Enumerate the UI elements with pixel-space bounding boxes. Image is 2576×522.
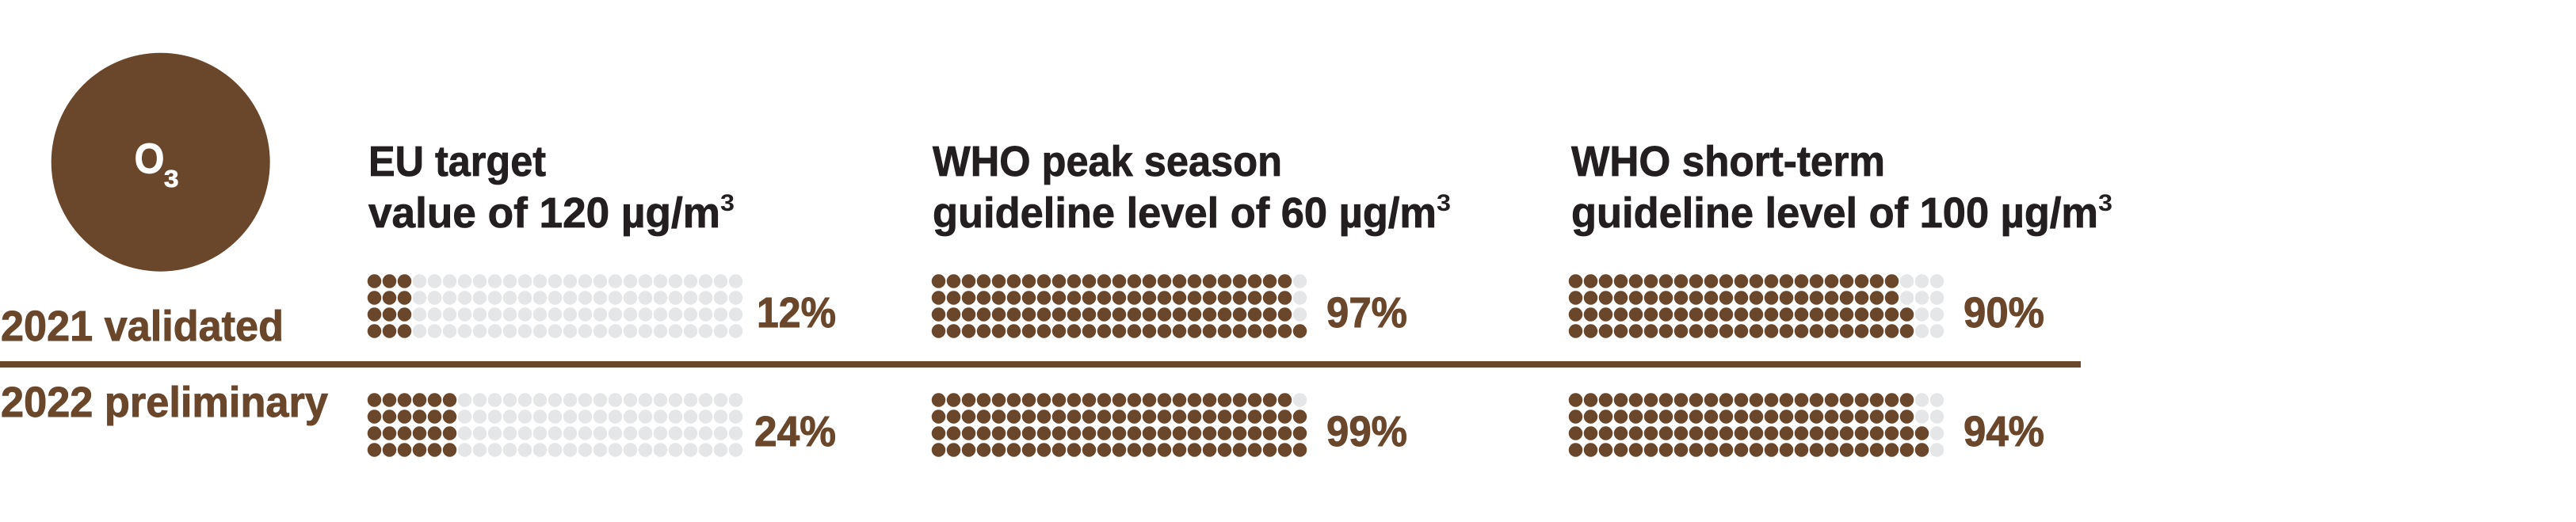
- divider line between years: [0, 361, 2081, 368]
- heading: WHO short-term guideline: 3: [2098, 190, 2112, 216]
- heading: WHO short-term guideline: [1571, 138, 2112, 237]
- row label: 2022 preliminary: 2022 preliminary: [1, 379, 328, 426]
- value: 97%: 97%: [1326, 289, 1407, 337]
- heading: WHO short-term guideline: WHO short-term: [1571, 138, 1885, 185]
- icon: O3 pollutant circle: [52, 53, 270, 272]
- value: 99%: 99%: [1326, 408, 1407, 455]
- icon: O3 pollutant circle: O: [135, 136, 165, 182]
- heading: WHO peak season guideline: [933, 138, 1451, 237]
- value: 94%: 94%: [1963, 408, 2044, 455]
- dot chart: WHO peak season 2021, 97%: [938, 281, 1300, 331]
- dot chart: WHO short-term 2021, 90%: [1575, 281, 1937, 331]
- dot chart: WHO peak season 2022, 99%: [938, 400, 1300, 450]
- heading: EU target value: 3: [720, 190, 735, 216]
- dot chart: EU target 2021, 12%: [374, 281, 736, 331]
- value: 90%: 90%: [1963, 289, 2044, 337]
- heading: EU target value: EU target: [368, 138, 546, 185]
- heading: WHO short-term guideline: guideline level of 100 µg/m: [1571, 189, 2098, 237]
- value: 24%: 24%: [754, 408, 836, 455]
- heading: WHO peak season guideline: WHO peak season: [933, 138, 1282, 185]
- dot chart: EU target 2022, 24%: [374, 400, 736, 450]
- dot chart: WHO short-term 2022, 94%: [1575, 400, 1937, 450]
- heading: EU target value: value of 120 µg/m: [368, 189, 720, 237]
- row label: 2021 validated: 2021 validated: [1, 303, 284, 350]
- heading: WHO peak season guideline: guideline level of 60 µg/m: [933, 189, 1437, 237]
- heading: EU target value: [368, 138, 735, 237]
- icon: O3 pollutant circle: 3: [164, 165, 179, 192]
- heading: WHO peak season guideline: 3: [1437, 190, 1451, 216]
- value: 12%: 12%: [757, 289, 836, 337]
